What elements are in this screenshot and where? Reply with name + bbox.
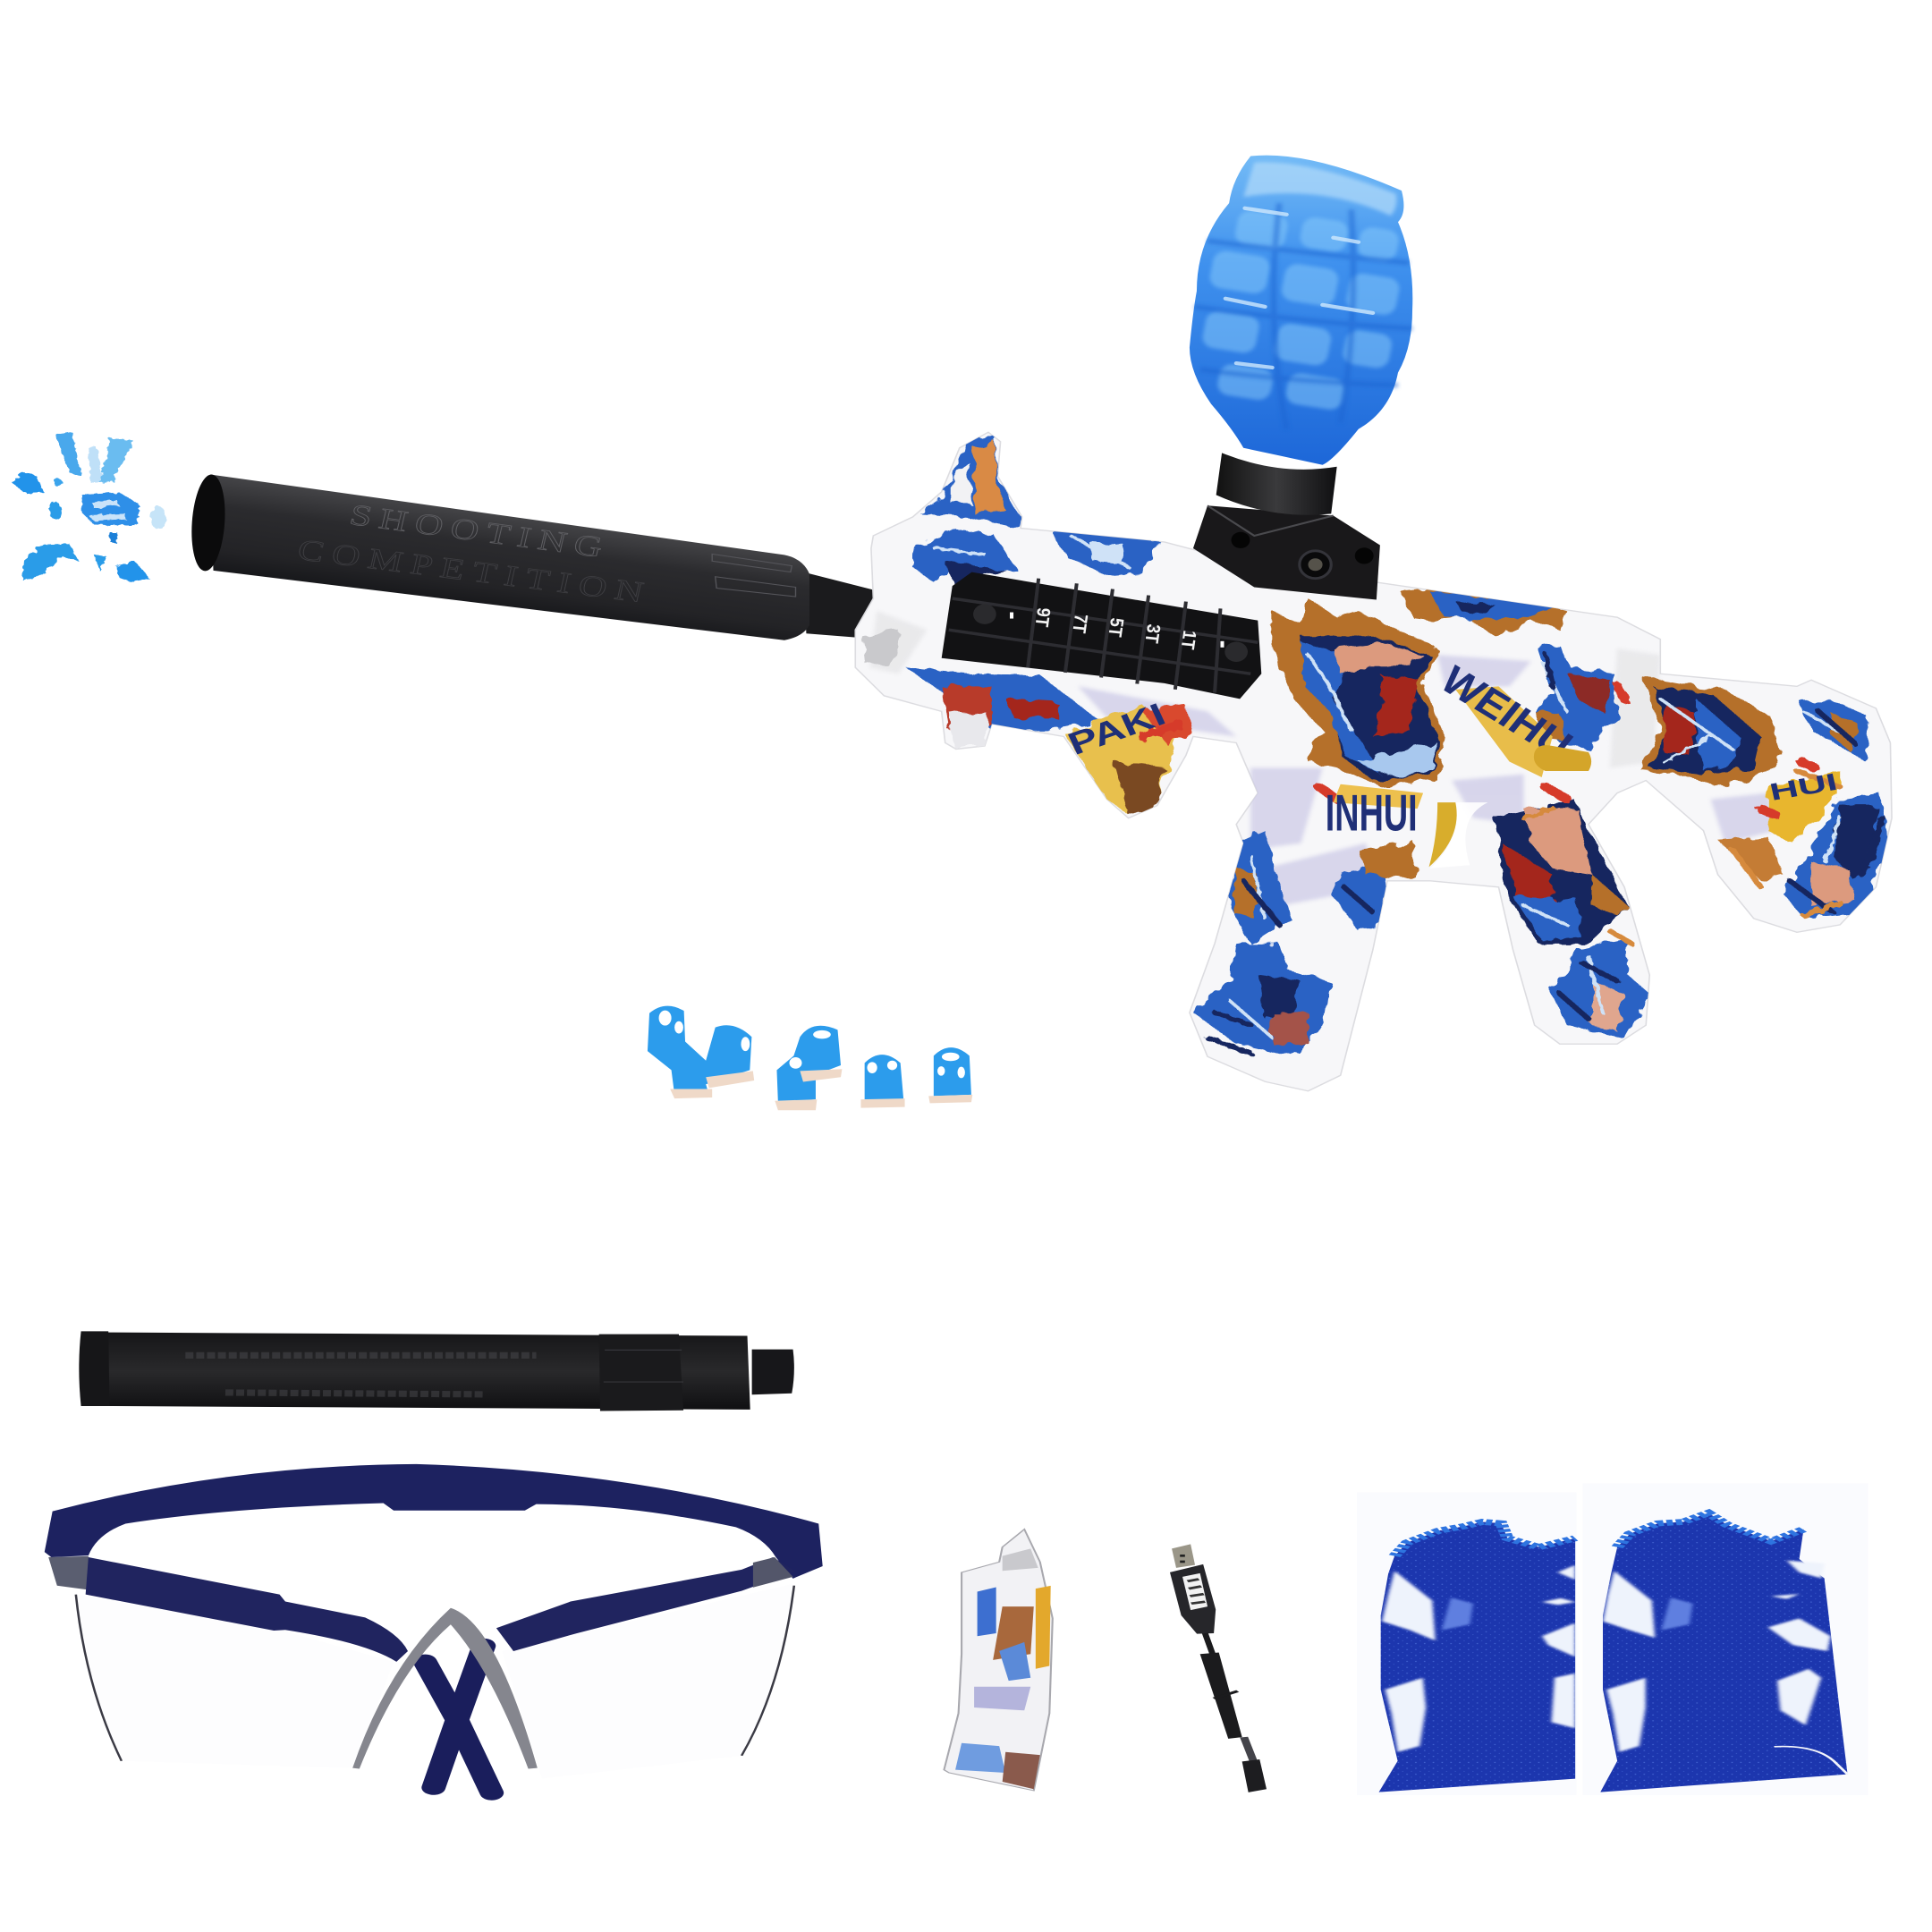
magazine graphic xyxy=(1193,944,1330,1056)
stock upper graphic xyxy=(1801,702,1868,762)
nose straps xyxy=(425,1646,492,1792)
charging handle xyxy=(1534,745,1591,771)
stock lower dinosaur graphic xyxy=(1783,793,1892,919)
shooting targets xyxy=(648,1006,972,1110)
spare magazine xyxy=(944,1530,1053,1791)
clear lenses xyxy=(77,1584,793,1779)
engraved barrel text xyxy=(294,499,648,609)
rail range markings: 5T xyxy=(1104,617,1127,638)
trigger xyxy=(1429,802,1457,867)
yellow graffiti word on foregrip: PAKI xyxy=(1063,696,1171,761)
gel bead bag left xyxy=(1357,1492,1577,1795)
rail range markings: 3T xyxy=(1140,623,1164,644)
handguard top graphics xyxy=(1053,531,1161,576)
dinosaur graphic upper right xyxy=(1535,646,1617,749)
rail range markings: 7T xyxy=(1068,613,1091,634)
graffiti line details xyxy=(935,536,1883,1054)
gel blaster xyxy=(855,156,1892,1091)
yellow INHUI graphic xyxy=(1326,784,1423,843)
rail range markings xyxy=(1030,606,1199,650)
USB charging cable xyxy=(1170,1544,1267,1792)
grip lower graphic xyxy=(1549,940,1649,1038)
blaster body xyxy=(855,432,1892,1091)
detached suppressor xyxy=(79,1331,794,1411)
rail range markings: 9T xyxy=(1030,606,1054,628)
trigger guard opening xyxy=(1430,802,1487,869)
front sight graphic xyxy=(920,436,1021,529)
graffiti pattern xyxy=(862,436,1892,1056)
lower handguard graphic xyxy=(906,667,1099,730)
splash of gel beads xyxy=(13,432,165,582)
goggle frame xyxy=(45,1464,823,1579)
safety goggles xyxy=(45,1464,823,1792)
stock dinosaur graphic xyxy=(1642,677,1783,787)
foregrip graphic xyxy=(1063,705,1179,815)
yellow stock text: HUI xyxy=(1767,768,1840,806)
dinosaur graphic main xyxy=(1272,598,1445,787)
engraved barrel text: COMPETITION xyxy=(294,534,648,609)
nose bridge xyxy=(352,1608,538,1768)
yellow WEIHU graphic: WEIHU xyxy=(1432,657,1581,767)
gel bead bag right xyxy=(1583,1483,1868,1795)
rail range markings: 1T xyxy=(1176,630,1199,650)
yellow INHUI graphic: INHUI xyxy=(1326,785,1418,843)
hopper mount xyxy=(1193,453,1380,600)
grip dinosaur graphic xyxy=(1495,800,1628,944)
grenade shaped gel bead hopper xyxy=(1190,156,1412,465)
engraved barrel text: SHOOTING xyxy=(347,499,607,564)
top strip graphic xyxy=(1402,589,1567,636)
mounted suppressor barrel xyxy=(189,474,876,640)
picatinny rail xyxy=(942,572,1261,699)
